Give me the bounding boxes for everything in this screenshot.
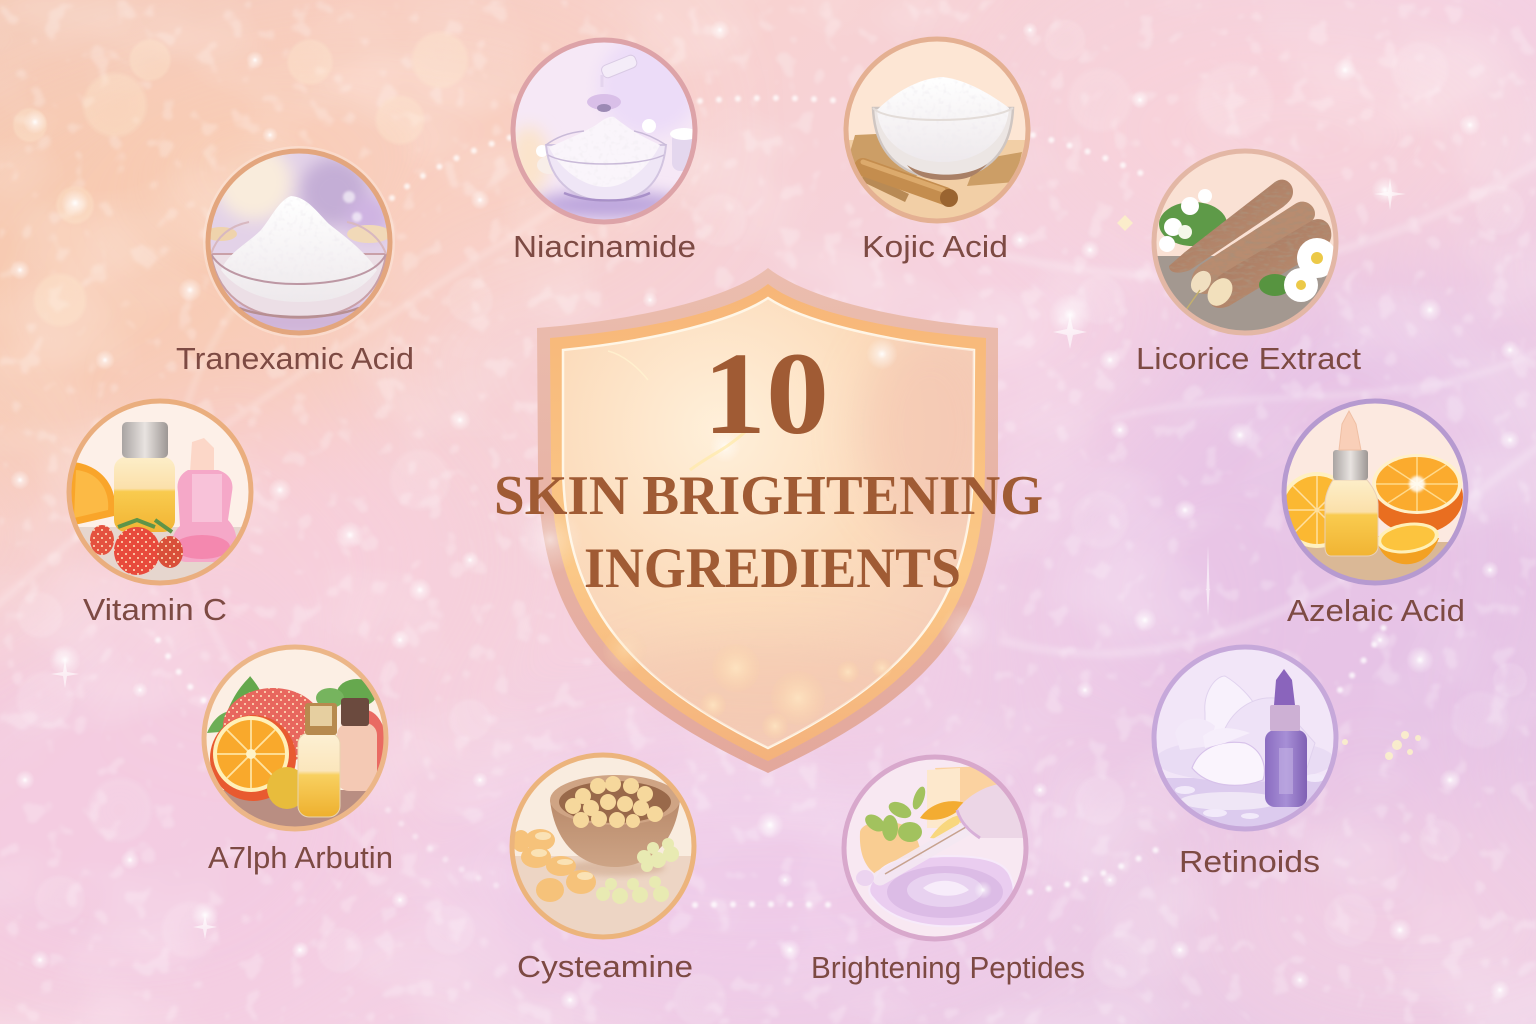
central shield [516,268,1000,773]
label: Azelaic Acid [1287,593,1465,628]
label: Tranexamic Acid [176,341,414,376]
label: Vitamin C [83,592,227,627]
label: Cysteamine [517,949,693,984]
title line 2: INGREDIENTS [584,537,961,600]
icon: dropper, botanicals and lilac cream [840,753,1030,943]
ingredient: Alpha Arbutin [200,643,393,875]
ingredient: Retinoids [1150,643,1340,879]
icon: wooden bowl of beans [508,751,698,941]
label: Niacinamide [513,229,696,264]
ingredient: Vitamin C [65,397,255,627]
title line 1: SKIN BRIGHTENING [494,465,1043,527]
icon: serum bottles, orange wedge, strawberries [65,397,255,587]
ingredient: Azelaic Acid [1279,397,1470,628]
icon: powder bowl with cinnamon roll [842,35,1032,225]
ingredient: Kojic Acid [842,35,1032,264]
label: Kojic Acid [862,229,1008,264]
icon: powder in glass bowl [203,144,395,338]
icon: orange, strawberry and bottles [200,643,390,835]
ingredient: Niacinamide [509,36,699,264]
icon: purple bottle on cream [1150,643,1340,838]
ingredient: Licorice Extract [1136,147,1361,376]
icon: dropper over glass bowl [509,36,699,226]
ingredient: Cysteamine [508,751,698,984]
label: A7lph Arbutin [208,840,393,875]
ingredient: Brightening Peptides [811,753,1085,985]
label: Brightening Peptides [811,950,1085,985]
dotted orbit connecting the ingredients [158,98,1385,905]
icon: dropper bottle with citrus halves [1279,397,1470,592]
title number: 10 [703,328,829,459]
label: Licorice Extract [1136,341,1361,376]
label: Retinoids [1179,844,1320,879]
icon: licorice roots and flowers [1150,147,1340,346]
ingredient: Tranexamic Acid [176,144,414,376]
shield bokeh lights [516,330,1000,740]
